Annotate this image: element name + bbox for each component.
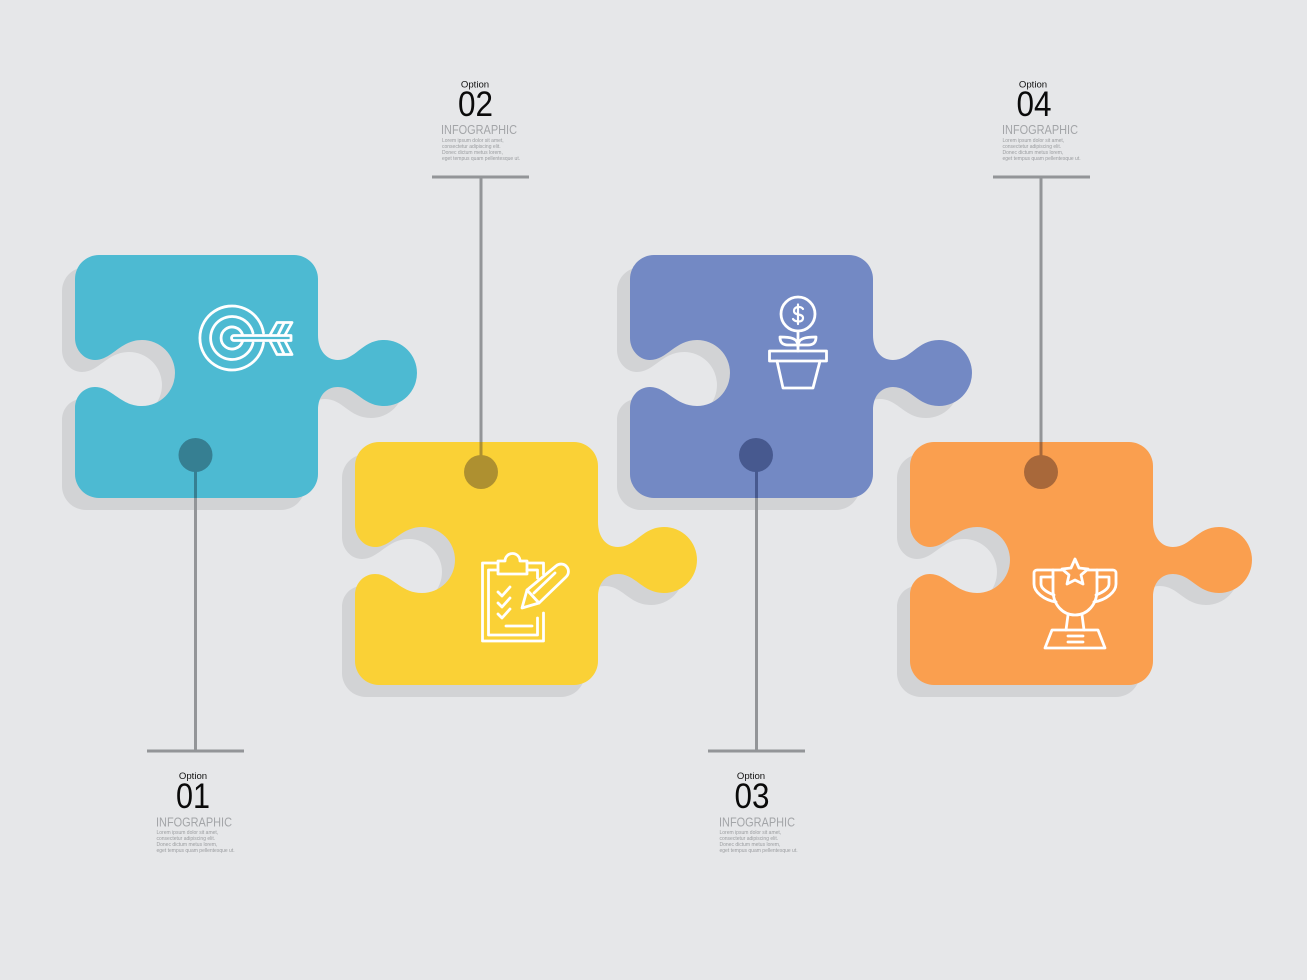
- connector: option 02: [432, 176, 529, 489]
- text block: option 03: INFOGRAPHIC: [719, 816, 795, 830]
- text block: option 01: Option: [179, 771, 207, 782]
- connector: option 01: [147, 438, 244, 752]
- icon: money plant in pot: [770, 297, 826, 388]
- text block: option 02: consectetur adipiscing elit.: [442, 144, 501, 150]
- text block: option 03: 03: [734, 777, 770, 816]
- text block: option 01: [156, 771, 235, 854]
- text block: option 01: Lorem ipsum dolor sit amet,: [156, 830, 218, 836]
- connector: option 04: [993, 176, 1090, 489]
- text block: option 01: eget tempus quam pellentesque ut.: [156, 848, 235, 854]
- text block: option 04: Option: [1019, 80, 1047, 90]
- icon: trophy with star: [1034, 559, 1116, 648]
- text block: option 03: Option: [737, 771, 765, 782]
- text block: option 04: 04: [1016, 85, 1052, 124]
- icon: clipboard with pencil: [482, 554, 568, 641]
- text block: option 04: INFOGRAPHIC: [1002, 123, 1078, 137]
- text block: option 04: consectetur adipiscing elit.: [1002, 144, 1061, 150]
- panel: puzzle piece 1 (blue): [62, 255, 417, 510]
- text block: option 02: Lorem ipsum dolor sit amet,: [442, 138, 504, 144]
- text block: option 03: Donec dictum metus lorem,: [720, 842, 780, 848]
- text block: option 03: Lorem ipsum dolor sit amet,: [720, 830, 781, 836]
- panel: puzzle piece 4 (orange): [897, 442, 1252, 697]
- text block: option 03: eget tempus quam pellentesque ut.: [720, 848, 798, 854]
- text block: option 02: [441, 80, 520, 162]
- text block: option 02: INFOGRAPHIC: [441, 123, 517, 137]
- text block: option 04: [1002, 80, 1081, 162]
- icon: target with arrow: [200, 306, 292, 370]
- text block: option 02: 02: [458, 85, 493, 124]
- text block: option 01: Donec dictum metus lorem,: [156, 842, 217, 848]
- text block: option 01: 01: [176, 777, 210, 816]
- text block: option 02: eget tempus quam pellentesque ut.: [442, 156, 520, 162]
- text block: option 04: eget tempus quam pellentesque ut.: [1002, 156, 1081, 162]
- text block: option 04: Donec dictum metus lorem,: [1002, 150, 1063, 156]
- text block: option 02: Option: [461, 80, 489, 90]
- text block: option 01: INFOGRAPHIC: [156, 816, 232, 830]
- panel: puzzle piece 3 (purple): [617, 255, 972, 510]
- text block: option 04: Lorem ipsum dolor sit amet,: [1002, 138, 1064, 144]
- text block: option 02: Donec dictum metus lorem,: [442, 150, 503, 156]
- connector: option 03: [708, 438, 805, 752]
- text block: option 01: consectetur adipiscing elit.: [156, 836, 215, 842]
- text block: option 03: consectetur adipiscing elit.: [720, 836, 778, 842]
- text block: option 03: [719, 771, 798, 854]
- panel: puzzle piece 2 (yellow): [342, 442, 697, 697]
